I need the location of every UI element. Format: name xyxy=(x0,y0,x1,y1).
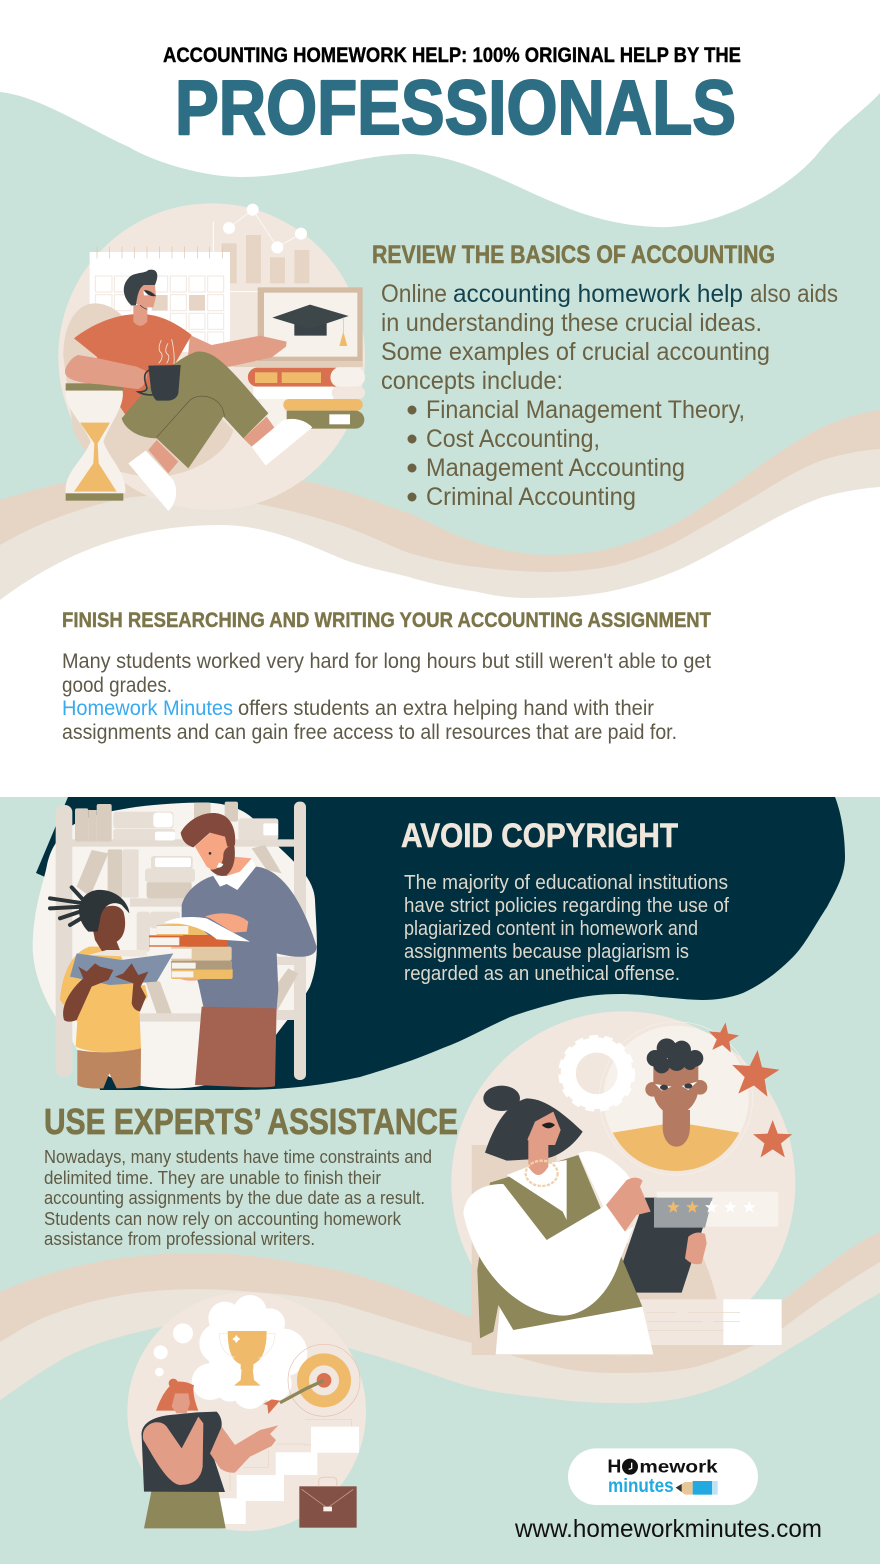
section: finish researching: assignments and can gain free access to all resources that are paid for. xyxy=(62,721,677,744)
white wave section xyxy=(0,487,880,800)
section: review the basics: Criminal Accounting xyxy=(426,483,636,511)
section: avoid copyright: have strict policies regarding the use of xyxy=(404,895,729,917)
section: review the basics: accounting homework help xyxy=(453,280,743,308)
section: use experts assistance: delimited time. They are unable to finish their xyxy=(44,1168,381,1188)
section: use experts assistance: accounting assignments by the due date as a result. xyxy=(44,1188,425,1208)
illustration: woman rating expert on tablet xyxy=(451,1011,795,1355)
title block: ACCOUNTING HOMEWORK HELP: 100% ORIGINAL HELP BY THE xyxy=(163,44,741,67)
heading: use experts assistance: USE EXPERTS’ ASSISTANCE xyxy=(44,1101,458,1142)
section: finish researching xyxy=(62,609,711,744)
section: review the basics: Financial Management Theory, xyxy=(426,396,745,424)
section: review the basics: Cost Accounting, xyxy=(426,425,600,453)
heading: finish researching: FINISH RESEARCHING AND WRITING YOUR ACCOUNTING ASSIGNMENT xyxy=(62,609,711,632)
section: finish researching: Homework Minutes xyxy=(62,697,233,720)
section: avoid copyright: regarded as an unethical offense. xyxy=(404,963,680,985)
top mint background wave xyxy=(0,92,880,600)
logo: homework minutes: H xyxy=(607,1456,621,1477)
logo: homework minutes: minutes xyxy=(608,1476,674,1497)
section: use experts assistance: assistance from professional writers. xyxy=(44,1229,315,1249)
section: review the basics: also aids xyxy=(750,280,838,308)
navy panel: avoid copyright xyxy=(36,797,845,1090)
logo: homework minutes xyxy=(568,1448,758,1505)
section: review the basics: concepts include: xyxy=(381,367,563,395)
section: review the basics: Management Accounting xyxy=(426,454,685,482)
title block: PROFESSIONALS xyxy=(175,65,736,151)
illustration: man studying with laptop and hourglass xyxy=(58,203,365,511)
section: avoid copyright: plagiarized content in homework and xyxy=(404,918,698,940)
section: review the basics: in understanding these crucial ideas. xyxy=(381,309,762,337)
lower mint background xyxy=(0,797,880,1564)
section: review the basics: Online xyxy=(381,280,447,308)
section: use experts assistance xyxy=(44,1101,458,1249)
section: finish researching: Many students worked very hard for long hours but still weren't able to get xyxy=(62,650,711,673)
section: finish researching: offers students an extra helping hand with their xyxy=(238,697,654,720)
heading: review the basics: REVIEW THE BASICS OF ACCOUNTING xyxy=(372,241,775,269)
illustration: teacher and child with books xyxy=(33,802,317,1089)
section: use experts assistance: Nowadays, many students have time constraints and xyxy=(44,1147,432,1167)
section: avoid copyright: assignments because plagiarism is xyxy=(404,941,689,963)
section: finish researching: good grades. xyxy=(62,674,172,697)
section: review the basics xyxy=(372,241,838,511)
beige wave band xyxy=(0,410,880,600)
light beige wave band xyxy=(0,449,880,600)
section: avoid copyright: The majority of educational institutions xyxy=(404,872,728,894)
heading: avoid copyright: AVOID COPYRIGHT xyxy=(401,817,678,855)
section: avoid copyright xyxy=(401,817,729,985)
title block xyxy=(163,44,741,151)
website url: www.homeworkminutes.com xyxy=(514,1515,822,1543)
logo: homework minutes: mework xyxy=(639,1457,719,1477)
illustration: woman thinking about trophy and target xyxy=(127,1292,366,1531)
lower light beige wave xyxy=(0,1262,880,1403)
section: review the basics: Some examples of crucial accounting xyxy=(381,338,770,366)
section: use experts assistance: Students can now rely on accounting homework xyxy=(44,1209,402,1229)
lower beige wave xyxy=(0,1232,880,1403)
